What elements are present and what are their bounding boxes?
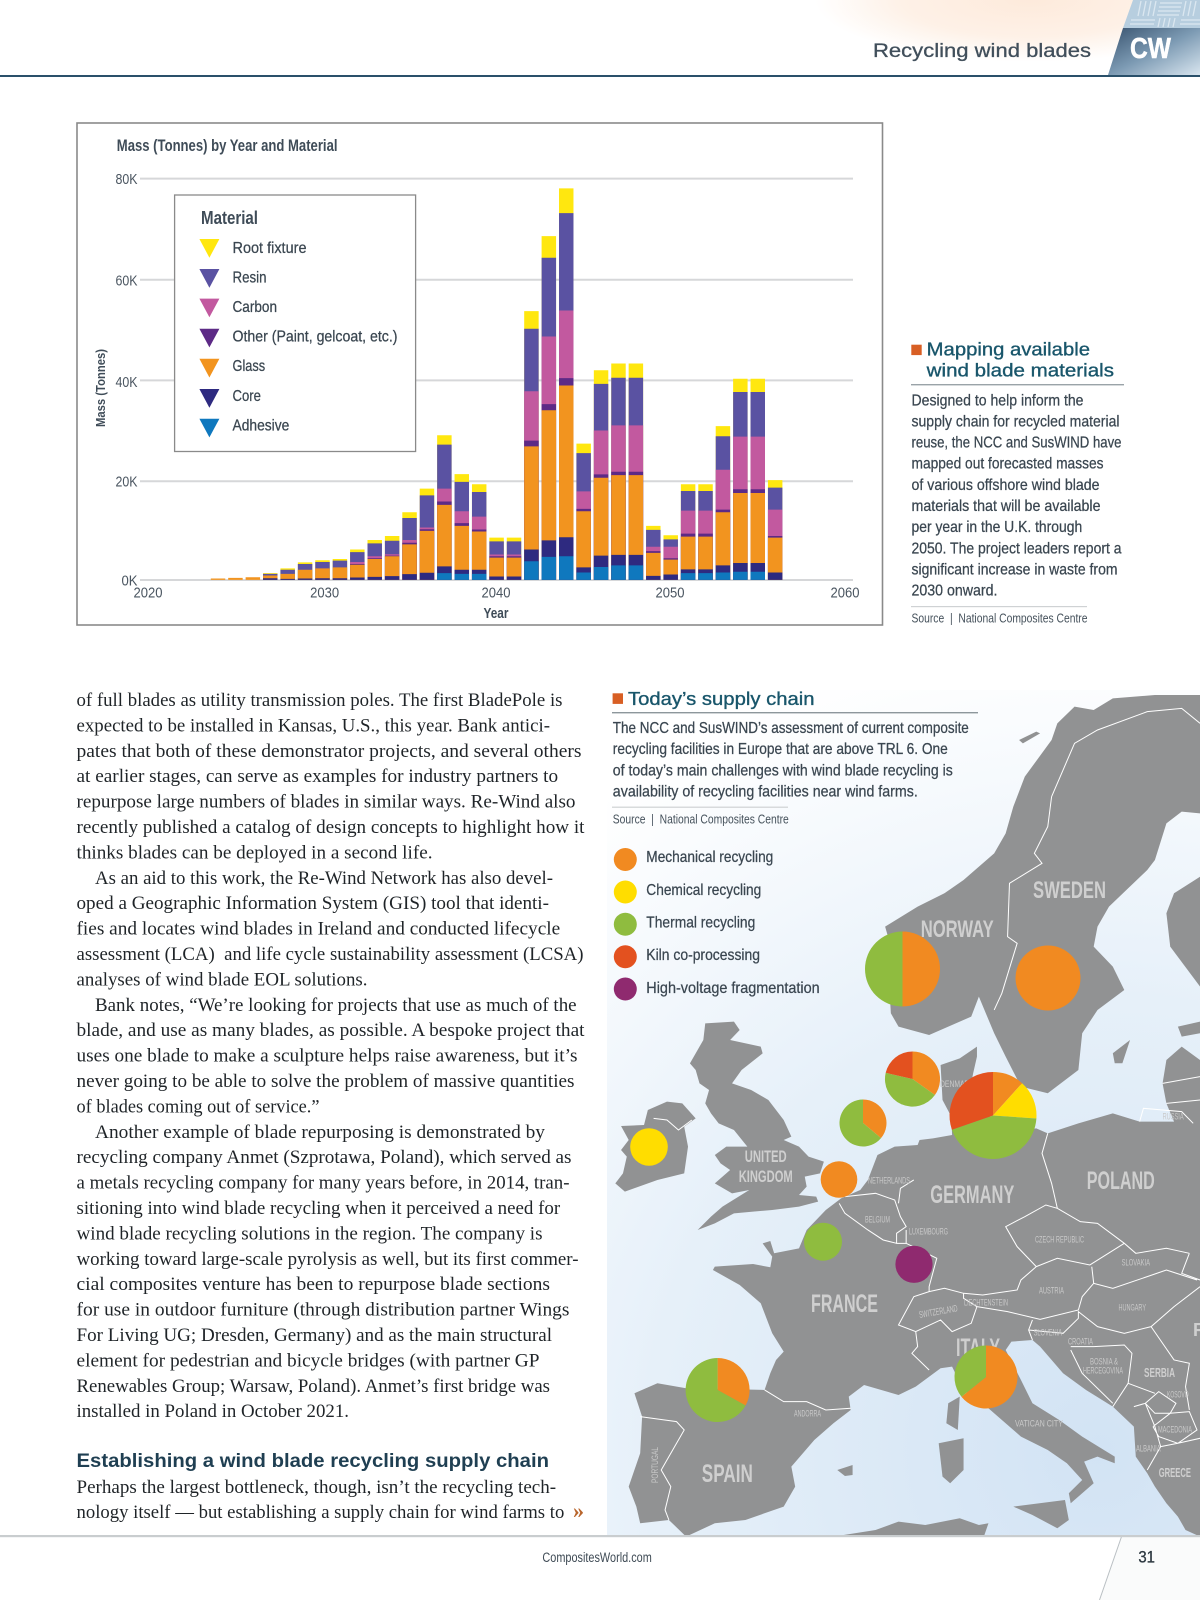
series: glass bbox=[211, 386, 782, 580]
article body text, column top: sitioning into wind blade recycling when it perceived a need for bbox=[76, 1198, 561, 1219]
article body text, column top: expected to be installed in Kansas, U.S., this year. Bank antici- bbox=[76, 715, 550, 736]
article body text, column top: Bank notes, “We’re looking for projects that use as much of the bbox=[95, 995, 577, 1016]
country labels: SWITZERLAND bbox=[918, 1303, 959, 1321]
side source: Source | National Composites Centre bbox=[912, 612, 1088, 626]
map legend: High-voltage fragmentation bbox=[646, 980, 820, 997]
article body text, column top: at earlier stages, can serve as examples for industry partners to bbox=[76, 766, 558, 787]
article body text, column top: uses one blade to make a sculpture helps raise awareness, but it’s bbox=[76, 1046, 578, 1067]
map legend: Thermal recycling bbox=[646, 914, 755, 932]
country labels: BELGIUM bbox=[865, 1214, 890, 1226]
country labels: HERCEGOVINA bbox=[1083, 1366, 1123, 1376]
section heading: Establishing a wind blade recycling supply chain bbox=[76, 1451, 549, 1472]
article body text, column top: Renewables Group; Warsaw, Poland). Anmet’s first bridge was bbox=[76, 1376, 550, 1397]
article body text, column top: recycling company Anmet (Szprotawa, Poland), which served as bbox=[76, 1147, 572, 1168]
pie: Spain bbox=[686, 1358, 750, 1422]
x axis labels: 2020 bbox=[134, 586, 162, 602]
country labels: SWEDEN bbox=[1033, 877, 1106, 904]
side heading: wind blade materials bbox=[926, 360, 1114, 381]
side description: 2030 onward. bbox=[912, 583, 998, 600]
country labels: LIECHTENSTEIN bbox=[964, 1298, 1008, 1308]
x axis labels: 2030 bbox=[310, 586, 339, 602]
chart legend: Carbon bbox=[232, 299, 277, 316]
series: carbon bbox=[350, 310, 782, 580]
map description: The NCC and SusWIND’s assessment of current composite bbox=[613, 720, 969, 737]
pie: Italy bbox=[954, 1346, 1017, 1408]
country labels: CROATIA bbox=[1068, 1336, 1093, 1348]
side description: reuse, the NCC and SusWIND have bbox=[912, 434, 1122, 452]
country labels: SLOVAKIA bbox=[1122, 1258, 1150, 1268]
y axis gridlines and labels bbox=[116, 172, 853, 590]
land: Scandinavia bbox=[885, 695, 1200, 1093]
pie: North Sea bbox=[839, 1100, 886, 1146]
map description: availability of recycling facilities near wind farms. bbox=[613, 784, 918, 800]
chart legend bbox=[175, 195, 416, 452]
panel: mapping available wind blade materials bbox=[911, 339, 1124, 626]
side description: supply chain for recycled material bbox=[912, 414, 1120, 430]
article body text, column top: never going to be able to solve the problem of massive quantities bbox=[76, 1071, 574, 1092]
pie: eastern France bbox=[895, 1246, 933, 1283]
country labels: PORTUGAL bbox=[650, 1447, 661, 1483]
article body text, column top: recently published a catalog of design concepts to highlight how it bbox=[76, 817, 585, 838]
article body text, column top: oped a Geographic Information System (GIS) tool that identi- bbox=[76, 893, 549, 914]
pie: northern Germany bbox=[950, 1072, 1037, 1159]
chart legend: Core bbox=[232, 388, 261, 405]
map legend: Mechanical recycling bbox=[646, 849, 773, 866]
x axis labels bbox=[134, 586, 860, 602]
article body text, column top: of blades coming out of service.” bbox=[76, 1096, 320, 1117]
logo: CW bbox=[1108, 28, 1200, 75]
side description: 2050. The project leaders report a bbox=[912, 540, 1122, 557]
map source: Source | National Composites Centre bbox=[613, 812, 789, 826]
x axis labels: 2060 bbox=[830, 586, 860, 602]
side description: significant increase in waste from bbox=[912, 562, 1118, 578]
country labels: POLAND bbox=[1087, 1167, 1155, 1195]
pie: Sweden bbox=[1016, 946, 1080, 1010]
article body text, column top: working toward large-scale pyrolysis as well, but its first commer- bbox=[76, 1249, 578, 1270]
country labels: KINGDOM bbox=[739, 1167, 793, 1186]
header band bbox=[0, 0, 1200, 77]
map description: of today’s main challenges with wind blade recycling is bbox=[613, 762, 953, 779]
article body text, column top: blade, and use as many blades, as possible. A bespoke project that bbox=[76, 1020, 585, 1041]
pie: Norway bbox=[865, 932, 940, 1006]
x axis title: Year bbox=[484, 606, 509, 622]
chart legend: Glass bbox=[232, 358, 265, 375]
pie: northern France bbox=[804, 1223, 842, 1261]
map heading: Today’s supply chain bbox=[628, 688, 814, 709]
land: Europe bbox=[615, 1022, 1200, 1540]
article body text, column top: of full blades as utility transmission poles. The first BladePole is bbox=[76, 690, 562, 711]
map description bbox=[613, 720, 969, 800]
logo: CW: CW bbox=[1130, 33, 1172, 65]
y axis gridlines and labels: 40K bbox=[116, 375, 138, 391]
map of Europe bbox=[607, 690, 1200, 1540]
side description: of various offshore wind blade bbox=[912, 477, 1100, 494]
y axis gridlines and labels: 20K bbox=[116, 474, 138, 490]
series: core bbox=[263, 537, 782, 580]
continuation arrow: » bbox=[573, 1498, 584, 1523]
y axis gridlines and labels: 0K bbox=[122, 574, 138, 590]
pie: Denmark offshore bbox=[885, 1052, 940, 1107]
x axis labels: 2050 bbox=[656, 586, 684, 602]
y axis title: Mass (Tonnes) bbox=[94, 349, 108, 427]
map description: recycling facilities in Europe that are above TRL 6. One bbox=[613, 741, 948, 758]
article body text, continuation: Perhaps the largest bottleneck, though, isn’t the recycling tech- bbox=[76, 1477, 556, 1498]
x axis labels: 2040 bbox=[482, 586, 510, 602]
country labels: ALBANIA bbox=[1136, 1444, 1161, 1454]
map legend: Chemical recycling bbox=[646, 882, 761, 899]
country labels: UNITED bbox=[745, 1147, 787, 1166]
chart legend: Resin bbox=[232, 270, 266, 286]
series: resin bbox=[263, 213, 782, 580]
article body text, column top: wind blade recycling solutions in the region. The company is bbox=[76, 1223, 542, 1244]
running head: Recycling wind blades bbox=[873, 40, 1091, 62]
chart title: Mass (Tonnes) by Year and Material bbox=[117, 137, 338, 155]
panel: today's supply chain bbox=[612, 688, 978, 1000]
article body text, column top: cial composites venture has been to repurpose blade sections bbox=[76, 1274, 550, 1295]
panel: stacked bar chart bbox=[77, 123, 882, 625]
country labels bbox=[650, 877, 1200, 1488]
series: other bbox=[350, 378, 782, 580]
country labels: CZECH REPUBLIC bbox=[1035, 1234, 1084, 1246]
footer url: CompositesWorld.com bbox=[542, 1550, 652, 1565]
country labels: DENMARK bbox=[940, 1079, 974, 1090]
article body text, column top: fies and locates wind blades in Ireland and conducted lifecycle bbox=[76, 919, 560, 940]
y axis gridlines and labels: 80K bbox=[116, 172, 138, 188]
map legend: Kiln co-processing bbox=[646, 947, 760, 964]
country labels: BOSNIA & bbox=[1090, 1356, 1118, 1368]
article body text, column top bbox=[76, 690, 585, 1422]
country labels: VATICAN CITY bbox=[1015, 1418, 1063, 1430]
side description bbox=[912, 392, 1122, 600]
series: root fixture bbox=[263, 188, 782, 580]
side description: Designed to help inform the bbox=[912, 392, 1084, 410]
article body text, column top: pates that both of these demonstrator projects, and several others bbox=[76, 741, 582, 762]
series: adhesive bbox=[437, 556, 765, 580]
country labels: ANDORRA bbox=[794, 1408, 821, 1420]
footer bbox=[0, 1535, 1200, 1600]
y axis gridlines and labels: 60K bbox=[116, 274, 138, 290]
pie: Ireland bbox=[630, 1128, 668, 1166]
country labels: RUSSIA bbox=[1163, 1112, 1184, 1122]
article body text, column top: analyses of wind blade EOL solutions. bbox=[76, 969, 368, 990]
country labels: GERMANY bbox=[930, 1181, 1015, 1209]
country labels: LUXEMBOURG bbox=[909, 1226, 948, 1238]
article body text, column top: thinks blades can be deployed in a second life. bbox=[76, 842, 432, 863]
chart legend: Other (Paint, gelcoat, etc.) bbox=[232, 328, 398, 346]
article body text, column top: installed in Poland in October 2021. bbox=[76, 1401, 349, 1422]
country labels: SERBIA bbox=[1144, 1365, 1175, 1380]
chart legend: Root fixture bbox=[232, 240, 307, 257]
article body text, column top: for use in outdoor furniture (through distribution partner Wings bbox=[76, 1300, 570, 1321]
article body text, column top: a metals recycling company for many years before, in 2014, tran- bbox=[76, 1173, 570, 1194]
article body text, column top: For Living UG; Dresden, Germany) and as the main structural bbox=[76, 1325, 552, 1346]
article body text, continuation: nology itself — but establishing a supply chain for wind farms to bbox=[76, 1502, 564, 1523]
side heading bbox=[926, 339, 1114, 381]
country labels: SLOVENIA bbox=[1034, 1328, 1062, 1338]
side description: mapped out forecasted masses bbox=[912, 456, 1104, 472]
header pattern bbox=[1123, 0, 1200, 28]
article body text, column top: repurpose large numbers of blades in similar ways. Re-Wind also bbox=[76, 792, 576, 813]
country labels: NORWAY bbox=[921, 916, 994, 943]
article body text, column top: assessment (LCA) and life cycle sustainability assessment (LCSA) bbox=[76, 944, 584, 965]
article body text, column top: As an aid to this work, the Re-Wind Network has also devel- bbox=[95, 868, 553, 889]
stacked bars bbox=[211, 188, 782, 580]
side description: materials that will be available bbox=[912, 498, 1101, 515]
pie: Thames estuary bbox=[821, 1161, 857, 1198]
side description: per year in the U.K. through bbox=[912, 519, 1082, 536]
country labels: HUNGARY bbox=[1118, 1302, 1146, 1314]
article body text, continuation bbox=[76, 1477, 564, 1523]
country labels: AUSTRIA bbox=[1039, 1286, 1064, 1296]
chart legend: Material bbox=[201, 208, 258, 228]
article body text, column top: element for pedestrian and bicycle bridges (with partner GP bbox=[76, 1350, 540, 1371]
article body text, column top: Another example of blade repurposing is demonstrated by bbox=[95, 1122, 545, 1143]
country labels: FRANCE bbox=[811, 1290, 878, 1318]
page number: 31 bbox=[1138, 1548, 1155, 1566]
country labels: ITALY bbox=[956, 1334, 1000, 1362]
country labels: SPAIN bbox=[702, 1460, 753, 1488]
chart legend: Adhesive bbox=[232, 418, 289, 434]
country labels: NETHERLANDS bbox=[868, 1176, 910, 1186]
side heading: Mapping available bbox=[927, 339, 1090, 360]
map legend bbox=[614, 848, 820, 1000]
